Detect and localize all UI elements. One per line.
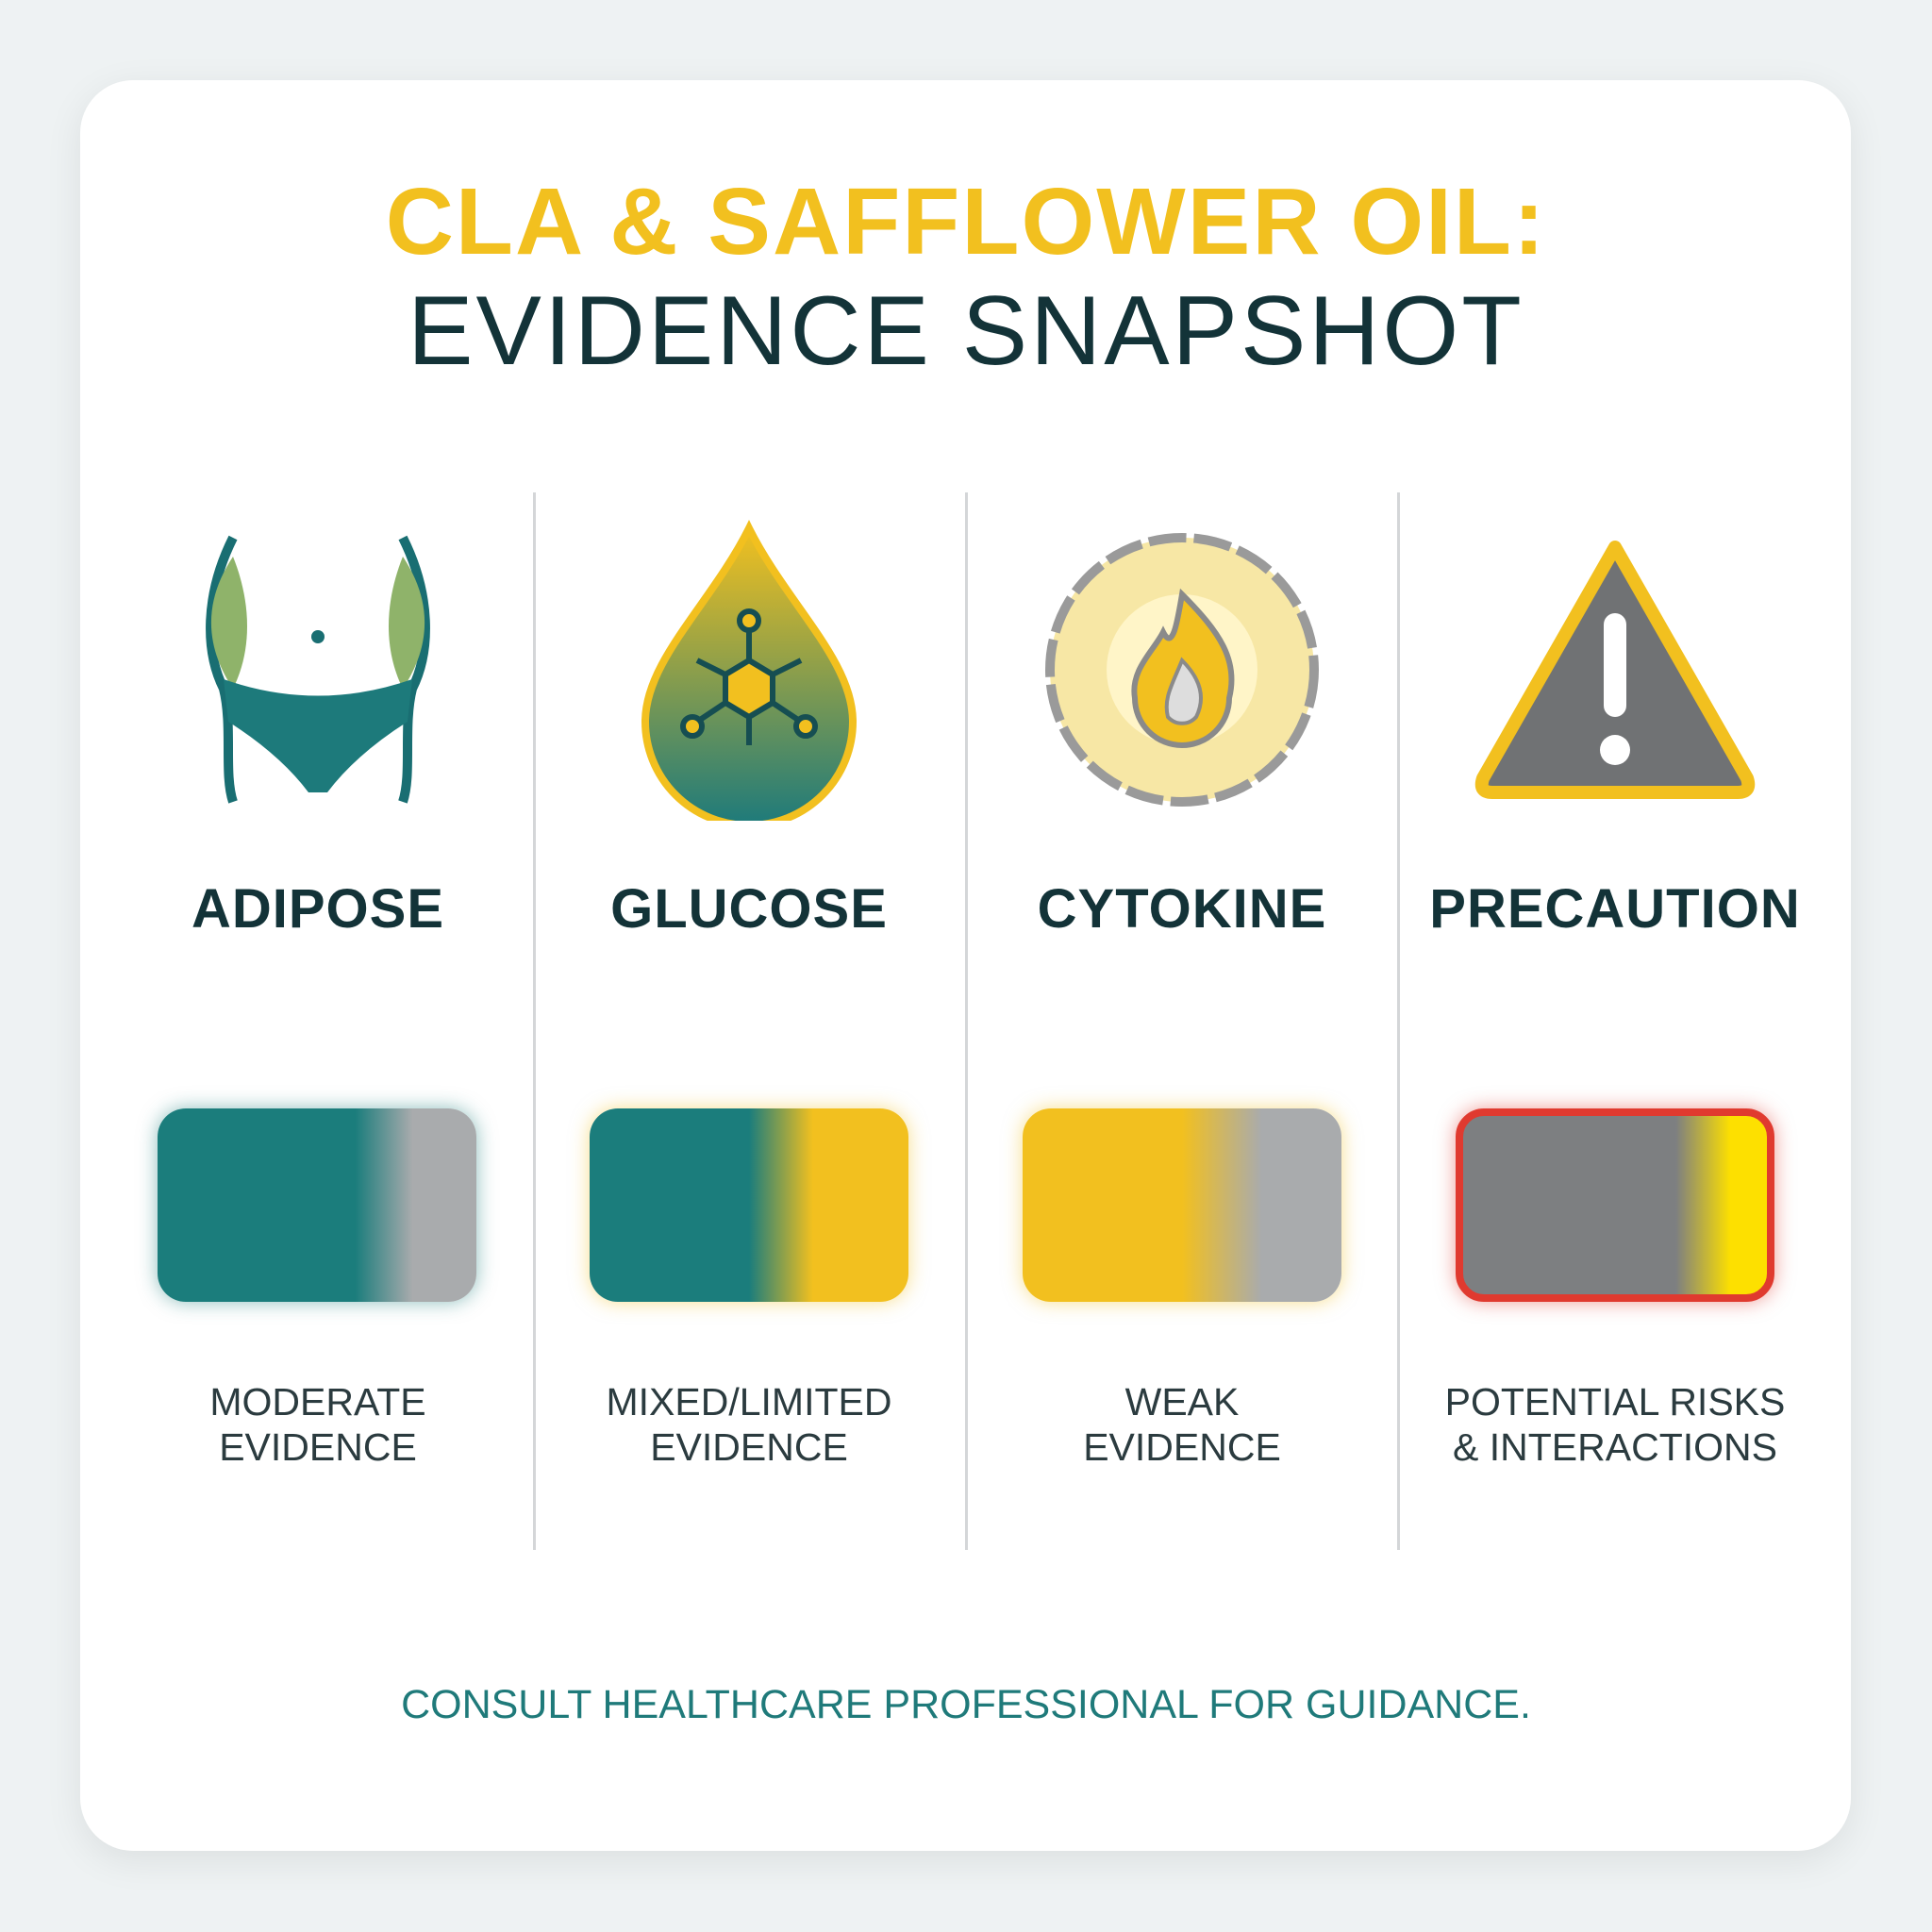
icon: cytokine: [1045, 533, 1319, 807]
text: moderate: MODERATE: [209, 1380, 426, 1424]
label: adipose: ADIPOSE: [192, 878, 444, 940]
text: weak: [1083, 1380, 1281, 1469]
text: moderate: [209, 1380, 426, 1469]
icon: warning triangle: [1475, 541, 1755, 799]
text: weak: WEAK: [1125, 1380, 1239, 1424]
title: CLA & SAFFLOWER OIL:: [386, 169, 1546, 275]
bar: mixed: [590, 1108, 908, 1302]
text: risks: [1445, 1380, 1785, 1469]
footer: CONSULT HEALTHCARE PROFESSIONAL FOR GUIDANCE.: [401, 1682, 1531, 1727]
label: glucose: GLUCOSE: [610, 878, 888, 940]
text: mixed: EVIDENCE: [650, 1425, 848, 1469]
bar: moderate: [158, 1108, 476, 1302]
text: risks: POTENTIAL RISKS: [1445, 1380, 1785, 1424]
bar: risks: [1456, 1108, 1774, 1302]
text: weak: EVIDENCE: [1083, 1425, 1281, 1469]
label: cytokine: CYTOKINE: [1038, 878, 1326, 940]
icon: glucose drop: [641, 520, 857, 821]
icon: adipose waist: [206, 536, 430, 804]
text: mixed: MIXED/LIMITED: [606, 1380, 891, 1424]
text: mixed: [606, 1380, 891, 1469]
bar: weak: [1023, 1108, 1341, 1302]
label: precaution: PRECAUTION: [1429, 878, 1801, 940]
text: moderate: EVIDENCE: [219, 1425, 417, 1469]
text: risks: & INTERACTIONS: [1453, 1425, 1777, 1469]
subtitle: EVIDENCE SNAPSHOT: [408, 276, 1524, 386]
